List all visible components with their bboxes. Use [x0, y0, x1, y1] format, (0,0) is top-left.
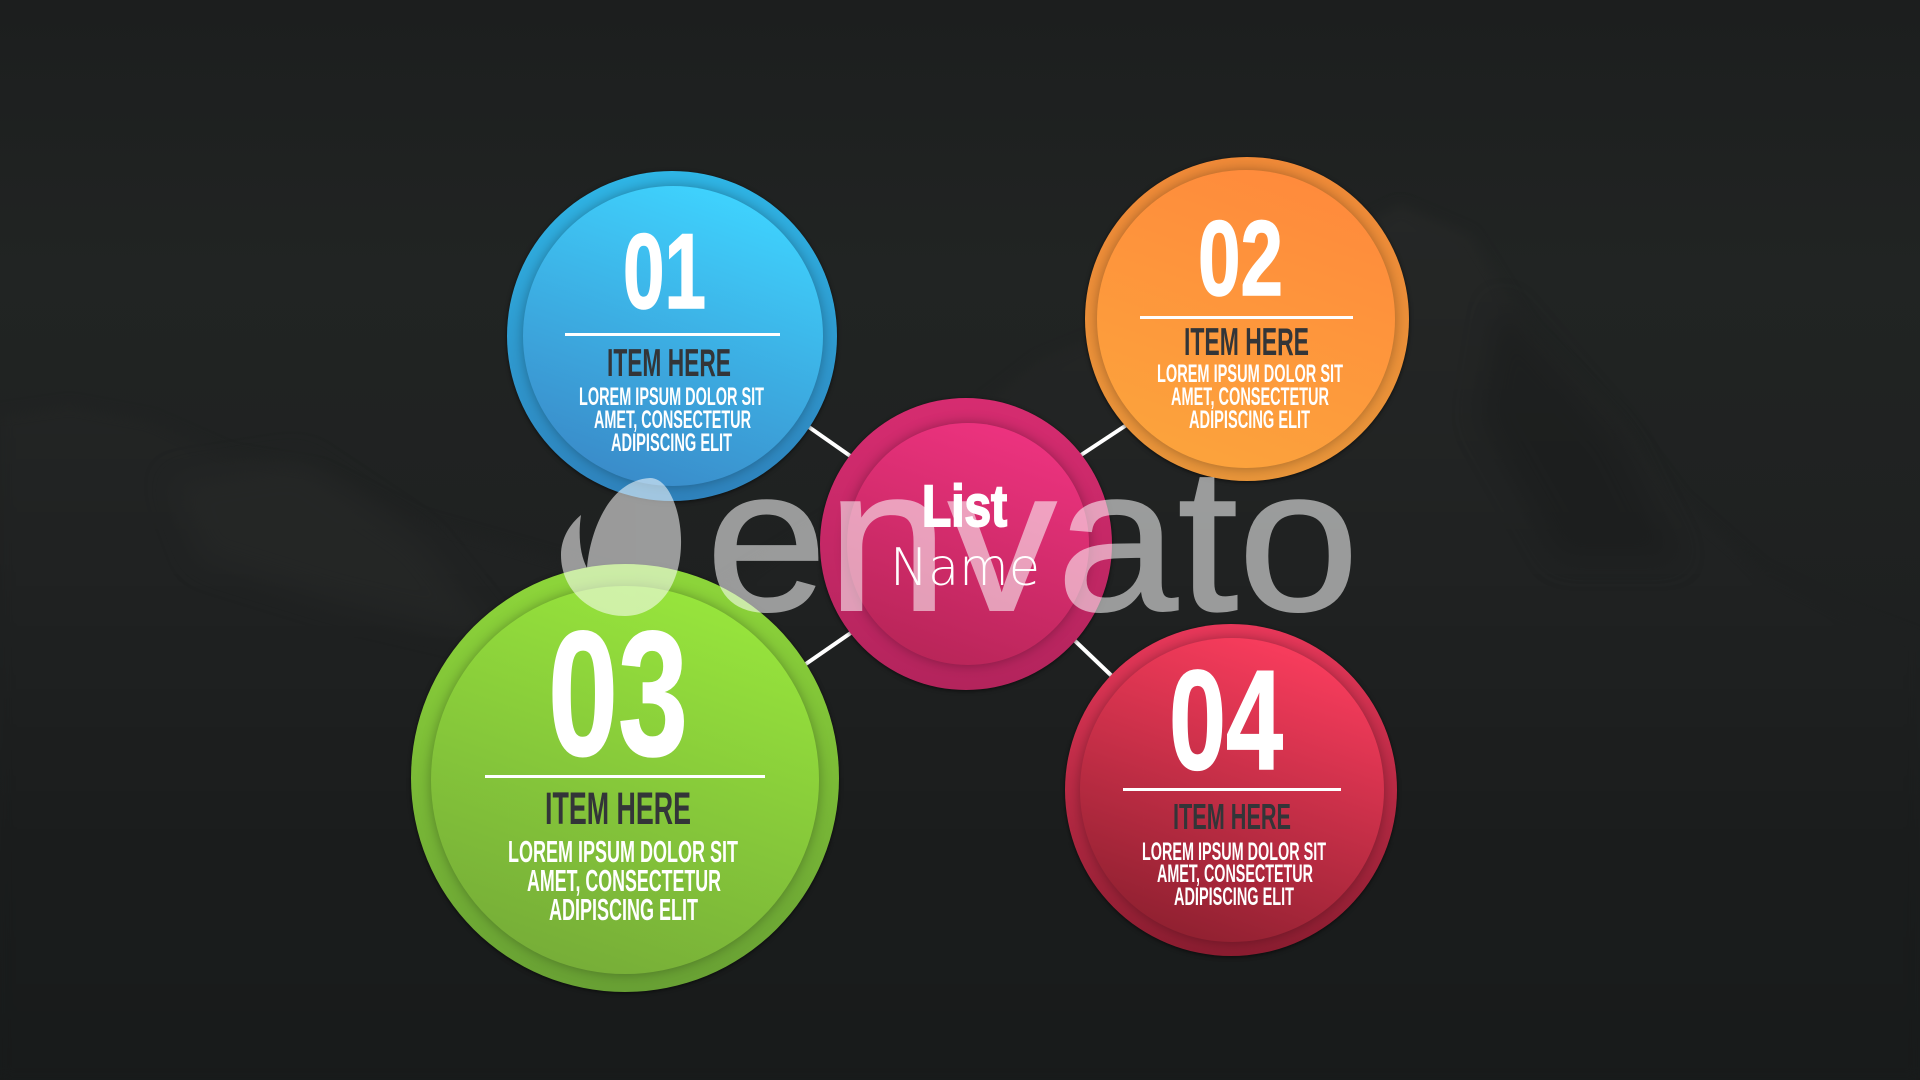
item body [579, 383, 764, 457]
center title [890, 474, 1040, 598]
number 03: 03 [548, 594, 688, 793]
item heading: ITEM HERE [1184, 321, 1309, 364]
item heading: ITEM HERE [545, 783, 691, 834]
circle 04 [1065, 624, 1397, 956]
item body: LOREM IPSUM DOLOR SIT [1157, 360, 1343, 388]
item heading: ITEM HERE [607, 342, 731, 385]
divider [1140, 316, 1353, 319]
connector lines [800, 424, 1128, 680]
wordmark: envato [706, 426, 1359, 654]
item body [508, 834, 738, 927]
item body: ADIPISCING ELIT [611, 429, 732, 457]
item heading: ITEM HERE [1173, 796, 1291, 837]
center title: Name [890, 538, 1040, 598]
item body: AMET, CONSECTETUR [1157, 860, 1313, 888]
divider [1123, 788, 1341, 791]
item body: LOREM IPSUM DOLOR SIT [508, 834, 738, 869]
item body: ADIPISCING ELIT [549, 892, 698, 927]
circle 02 [1085, 157, 1409, 481]
item body: AMET, CONSECTETUR [527, 863, 721, 898]
icon: leaf [561, 478, 681, 616]
item body: LOREM IPSUM DOLOR SIT [1142, 838, 1326, 866]
circle 01 [507, 171, 837, 501]
item body [1142, 838, 1326, 911]
item body: ADIPISCING ELIT [1189, 406, 1310, 434]
item body: AMET, CONSECTETUR [594, 406, 751, 434]
item body: AMET, CONSECTETUR [1171, 383, 1329, 411]
watermark: envato logo [561, 426, 1359, 654]
item body [1157, 360, 1343, 434]
number 04: 04 [1169, 641, 1283, 800]
divider [485, 775, 765, 778]
center title: List [922, 474, 1007, 539]
item body: LOREM IPSUM DOLOR SIT [579, 383, 764, 411]
number 01: 01 [623, 211, 706, 331]
divider [565, 333, 780, 336]
number 02: 02 [1198, 198, 1283, 318]
item body: ADIPISCING ELIT [1174, 883, 1294, 911]
center circle: List Name [820, 398, 1112, 690]
circle 03 [411, 564, 839, 992]
